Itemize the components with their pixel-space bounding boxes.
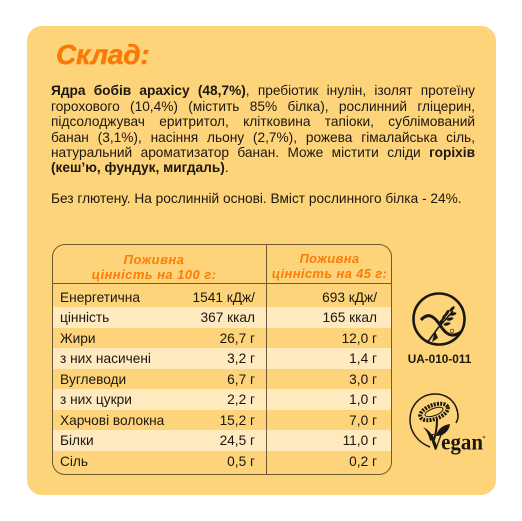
row: saturated fat: з них насичені xyxy=(60,351,151,366)
row: carbohydrates: 6,7 г xyxy=(227,372,255,387)
row: sugars xyxy=(53,389,391,410)
row: sugars: з них цукри xyxy=(60,392,132,407)
icon: vegan sunflower logo xyxy=(409,393,486,454)
text block: ingredients: підсолоджувач еритритол, клітковина тапіоки, сублімований xyxy=(51,114,475,129)
row: salt: 0,2 г xyxy=(349,454,377,469)
row: protein: Білки xyxy=(60,433,94,448)
text block: gluten free note: Без глютену. На рослинній основі. Вміст рослинного білка - 24%. xyxy=(51,191,462,206)
table heading: per 45 g: цінність на 45 г: xyxy=(272,266,387,281)
row: energy kcal: 367 ккал xyxy=(200,310,255,325)
text block: ingredients: горохового (10,4%) (містить 85% білка), рослинний гліцерин, xyxy=(51,98,475,114)
row: energy kJ xyxy=(60,290,377,305)
row: sugars: 2,2 г xyxy=(227,392,255,407)
row: fibre: Харчові волокна xyxy=(60,413,164,428)
row: fat xyxy=(60,331,377,346)
row: energy kJ: 693 кДж/ xyxy=(322,290,377,305)
row: carbohydrates: Вуглеводи xyxy=(60,372,126,387)
row: salt: Сіль xyxy=(60,454,88,469)
row: protein xyxy=(53,430,391,451)
nutrition table xyxy=(52,244,392,475)
row: energy kcal: цінність xyxy=(60,310,109,325)
row: fat: Жири xyxy=(60,331,96,346)
title: Склад: xyxy=(56,39,150,70)
icon: gluten free badge xyxy=(408,292,472,366)
table heading: per 100 g: цінність на 100 г: xyxy=(92,267,216,282)
text block: ingredients: банан (3,1%), насіння льону (2,7%), рожева гімалайська сіль, xyxy=(51,130,475,144)
row: energy kJ: 1541 кДж/ xyxy=(193,290,255,305)
row: energy kcal xyxy=(53,307,391,328)
row: protein: 24,5 г xyxy=(220,433,255,448)
icon: vegan sunflower logo: Vegan xyxy=(428,430,483,454)
row: fat: 12,0 г xyxy=(342,331,377,346)
text block: ingredients: Ядра бобів арахісу (48,7%), пребіотик інулін, ізолят протеїну xyxy=(51,83,475,98)
row: carbohydrates xyxy=(60,372,377,387)
text block: ingredients: (кеш’ю, фундук, мигдаль). xyxy=(51,160,229,175)
row: saturated fat xyxy=(53,348,391,369)
row: protein: 11,0 г xyxy=(343,433,377,448)
row: fibre: 15,2 г xyxy=(220,413,255,428)
table heading: per 100 g xyxy=(92,252,216,282)
row: saturated fat: 3,2 г xyxy=(227,351,255,366)
row: fibre xyxy=(60,413,377,428)
icon: gluten free badge: UA-010-011 xyxy=(408,352,472,366)
row: carbohydrates: 3,0 г xyxy=(349,372,377,387)
row: saturated fat: 1,4 г xyxy=(349,351,377,366)
row: fibre: 7,0 г xyxy=(349,413,377,428)
text block: ingredients xyxy=(51,83,475,175)
row: energy kJ: Енергетична xyxy=(60,290,140,305)
table heading: per 100 g: Поживна xyxy=(124,252,184,267)
row: salt xyxy=(60,454,377,469)
text block: ingredients: натуральний ароматизатор банан. Може містити сліди горіхів xyxy=(51,145,475,160)
row: sugars: 1,0 г xyxy=(349,392,377,407)
row: salt: 0,5 г xyxy=(227,454,255,469)
table heading: per 45 g: Поживна xyxy=(299,251,360,266)
row: fat: 26,7 г xyxy=(220,331,255,346)
row: energy kcal: 165 ккал xyxy=(322,310,377,325)
table heading: per 45 g xyxy=(272,251,387,281)
